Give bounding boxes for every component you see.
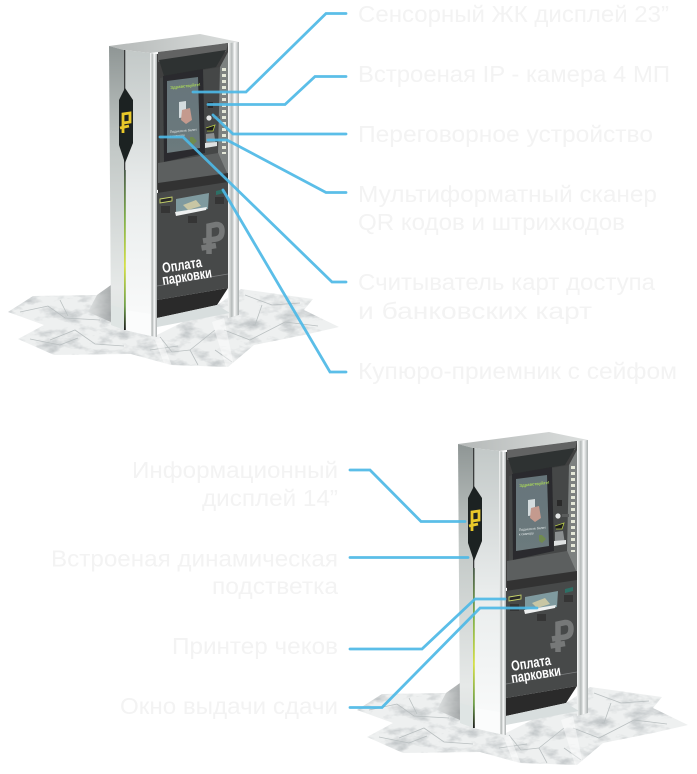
change window [525,591,558,612]
touch display [516,475,550,551]
labels: top kiosk: Считыватель карт доступа [358,269,656,295]
labels: top kiosk: Купюро-приемник с сейфом [358,358,677,384]
ruble symbol [202,224,222,254]
side perforated panel [567,450,577,574]
touch display: к сканеру [519,531,534,536]
info display [468,486,482,561]
shelf [158,153,228,185]
payment panel [157,182,230,327]
touch display 23: к сканеру [170,133,185,138]
side controls [554,500,569,546]
panel caption: парковки [161,265,213,289]
shelf [507,551,577,583]
labels: top kiosk: Встроеная IP - камера 4 МП [358,61,670,87]
callout lines: bottom kiosk [350,470,537,708]
touch display: Здравствуйте! [519,480,550,488]
ruble symbol [550,622,571,652]
display bezel [512,467,554,560]
receipt printer slot [509,595,521,601]
change window [176,193,209,214]
kiosk body [109,34,239,337]
receipt printer slot [160,197,172,203]
touch display 23: Здравствуйте! [170,82,201,90]
kiosk: front view top [8,34,339,367]
labels: bottom kiosk: Информационный [132,457,338,483]
upper recess [506,441,577,588]
panel caption: парковки [510,663,562,687]
panel caption: Оплата [161,255,204,277]
payment panel [506,580,579,725]
panel caption: Оплата [510,653,553,675]
labels: bottom kiosk: подстветка [212,573,339,599]
bill acceptor slot [216,189,224,195]
marble floor [8,285,339,367]
labels: bottom kiosk: Окно выдачи сдачи [120,693,338,719]
labels: top kiosk: и банковских карт [358,298,592,324]
labels: top kiosk: Переговорное устройство [358,121,653,147]
labels: bottom kiosk: дисплей 14” [202,485,338,511]
side controls [205,102,220,148]
panel caption [161,255,213,289]
labels: top kiosk [358,1,677,384]
callout lines: top kiosk [160,14,346,372]
marble floor [357,683,688,765]
touch display 23 [167,77,201,153]
labels: top kiosk: Мультиформатный сканер [358,181,657,207]
bill acceptor slot [565,587,573,593]
display bezel [163,69,205,162]
panel caption [510,653,562,687]
touch display: Поднесите билет [519,526,546,532]
side perforated panel [218,52,228,176]
info display 14 [119,88,133,163]
labels: top kiosk: Сенсорный ЖК дисплей 23” [358,1,669,27]
labels: bottom kiosk [51,457,339,719]
labels: bottom kiosk: Встроеная динамическая [51,546,338,572]
kiosk: rear side view bottom [357,432,688,765]
touch display 23: Поднесите билет [170,128,197,134]
labels: top kiosk: QR кодов и штрихкодов [358,209,625,235]
labels: bottom kiosk: Принтер чеков [172,633,338,659]
upper recess [157,43,228,190]
kiosk body [458,432,588,735]
